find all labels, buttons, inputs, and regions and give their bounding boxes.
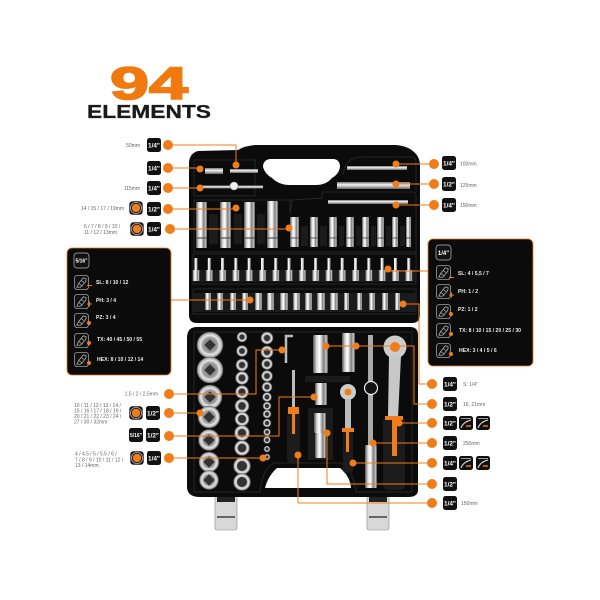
right callouts lower: 1/2" — [444, 482, 456, 488]
panel: left bits 5/16: PH: 3 / 4 — [96, 298, 116, 304]
large sockets column — [197, 332, 223, 490]
right callouts lower — [427, 377, 490, 510]
large ratchet — [383, 336, 406, 490]
right callouts lower: 1/4" — [444, 382, 456, 388]
left callouts lower: 4 / 4.5 / 5 / 5.5 / 6 / — [75, 452, 117, 458]
left callouts upper: 1/4" — [148, 166, 160, 172]
panel: left bits 5/16: HEX: 8 / 10 / 12 / 14 — [97, 357, 143, 363]
left callouts upper: 1/4" — [148, 142, 160, 150]
left callouts upper — [81, 138, 175, 236]
sockets and joints centre — [313, 333, 355, 458]
right callouts upper: 125mm — [460, 183, 477, 189]
right callouts lower: 1/4" — [444, 500, 456, 508]
title: 94 elements: ELEMENTS — [87, 101, 211, 122]
right callouts lower: S: 1/4" — [463, 382, 478, 388]
title: 94 elements — [87, 58, 211, 122]
right callouts upper: 100mm — [460, 162, 477, 168]
left callouts upper: 1/4" — [148, 226, 160, 234]
panel: right bits 1/4: TX: 8 / 10 / 15 / 20 / 25 / 30 — [459, 328, 521, 334]
left callouts upper: 1/4" — [148, 186, 160, 192]
medium sockets column — [234, 332, 250, 490]
right callouts lower: 1/4" — [444, 460, 456, 468]
left callouts upper: 6 / 7 / 8 / 9 / 10 / — [84, 224, 121, 230]
panel: left bits 5/16: SL: 8 / 10 / 12 — [96, 280, 128, 286]
left callouts lower: 13 / 14mm — [75, 463, 99, 469]
left callouts upper: 50mm — [126, 143, 140, 149]
left callouts lower: 1/2" — [147, 432, 159, 440]
panel: right bits 1/4: HEX: 3 / 4 / 5 / 6 — [459, 348, 497, 354]
right callouts lower: 1/2" — [444, 402, 456, 408]
deep sockets 1/2 — [196, 201, 278, 248]
left callouts lower: 1/4" — [148, 456, 160, 462]
left callouts lower: 20 / 21 / 22 / 23 / 24 / — [74, 414, 122, 420]
case: upper half — [189, 145, 420, 323]
left callouts lower — [74, 389, 174, 469]
deep sockets 1/4 — [290, 217, 411, 247]
small sockets column — [261, 332, 273, 460]
left callouts lower: 7 / 8 / 9 / 10 / 11 / 12 / — [75, 458, 124, 464]
left callouts lower: 10 / 11 / 12 / 13 / 14 / — [74, 403, 121, 409]
small ratchet — [340, 384, 356, 473]
case: lower half — [187, 327, 418, 497]
left callouts upper: 1/2" — [148, 206, 160, 214]
left callouts upper: 115mm — [124, 186, 140, 192]
extension bars upper — [202, 166, 410, 204]
panel: right bits 1/4: PH: 1 / 2 — [458, 289, 478, 295]
right callouts lower: 150mm — [461, 501, 478, 507]
sliding T-bar — [364, 335, 378, 488]
leader target dots — [196, 160, 406, 466]
right callouts upper: 1/4" — [443, 160, 455, 168]
right callouts lower: 1/2" — [444, 420, 456, 428]
panel: right bits 1/4: 1/4" — [438, 251, 449, 257]
left callouts lower: 1/2" — [147, 410, 159, 418]
clasps — [215, 492, 389, 530]
right callouts lower: 1/2" — [444, 440, 456, 448]
left callouts upper: 14 / 15 / 17 / 19mm — [81, 206, 124, 212]
panel: right bits 1/4: SL: 4 / 5,5 / 7 — [458, 271, 489, 277]
panel: left bits 5/16: TX: 40 / 45 / 50 / 55 — [97, 337, 142, 343]
right callouts lower: 250mm — [463, 441, 480, 447]
panel: right bits 1/4: PZ: 1 / 2 — [458, 307, 478, 313]
panel: right bits 1/4 — [428, 239, 533, 366]
title: 94 elements: 94 — [110, 58, 188, 109]
right callouts upper: 1/2" — [443, 182, 455, 188]
panel: left bits 5/16 — [67, 248, 171, 375]
right callouts upper — [429, 156, 477, 212]
left callouts lower: 15 / 16 / 17 / 18 / 19 / — [74, 408, 122, 414]
bits row 1 — [192, 258, 412, 281]
left callouts lower: 5/16" — [130, 433, 143, 439]
screwdriver — [287, 370, 300, 463]
panel: left bits 5/16: PZ: 3 / 4 — [96, 315, 116, 321]
left callouts upper: 11 / 12 / 13mm — [84, 230, 117, 236]
right callouts lower: 16, 21mm — [463, 402, 485, 408]
left callouts lower: 27 / 30 / 32mm — [74, 420, 107, 426]
right callouts upper: 1/4" — [443, 202, 455, 210]
hex keys — [286, 336, 293, 363]
bits row 2 — [205, 293, 400, 310]
right callouts upper: 150mm — [460, 203, 477, 209]
panel: left bits 5/16: 5/16" — [75, 258, 88, 264]
leader lines — [168, 145, 434, 503]
left callouts lower: 1,5 / 2 / 2,5mm — [125, 392, 158, 398]
